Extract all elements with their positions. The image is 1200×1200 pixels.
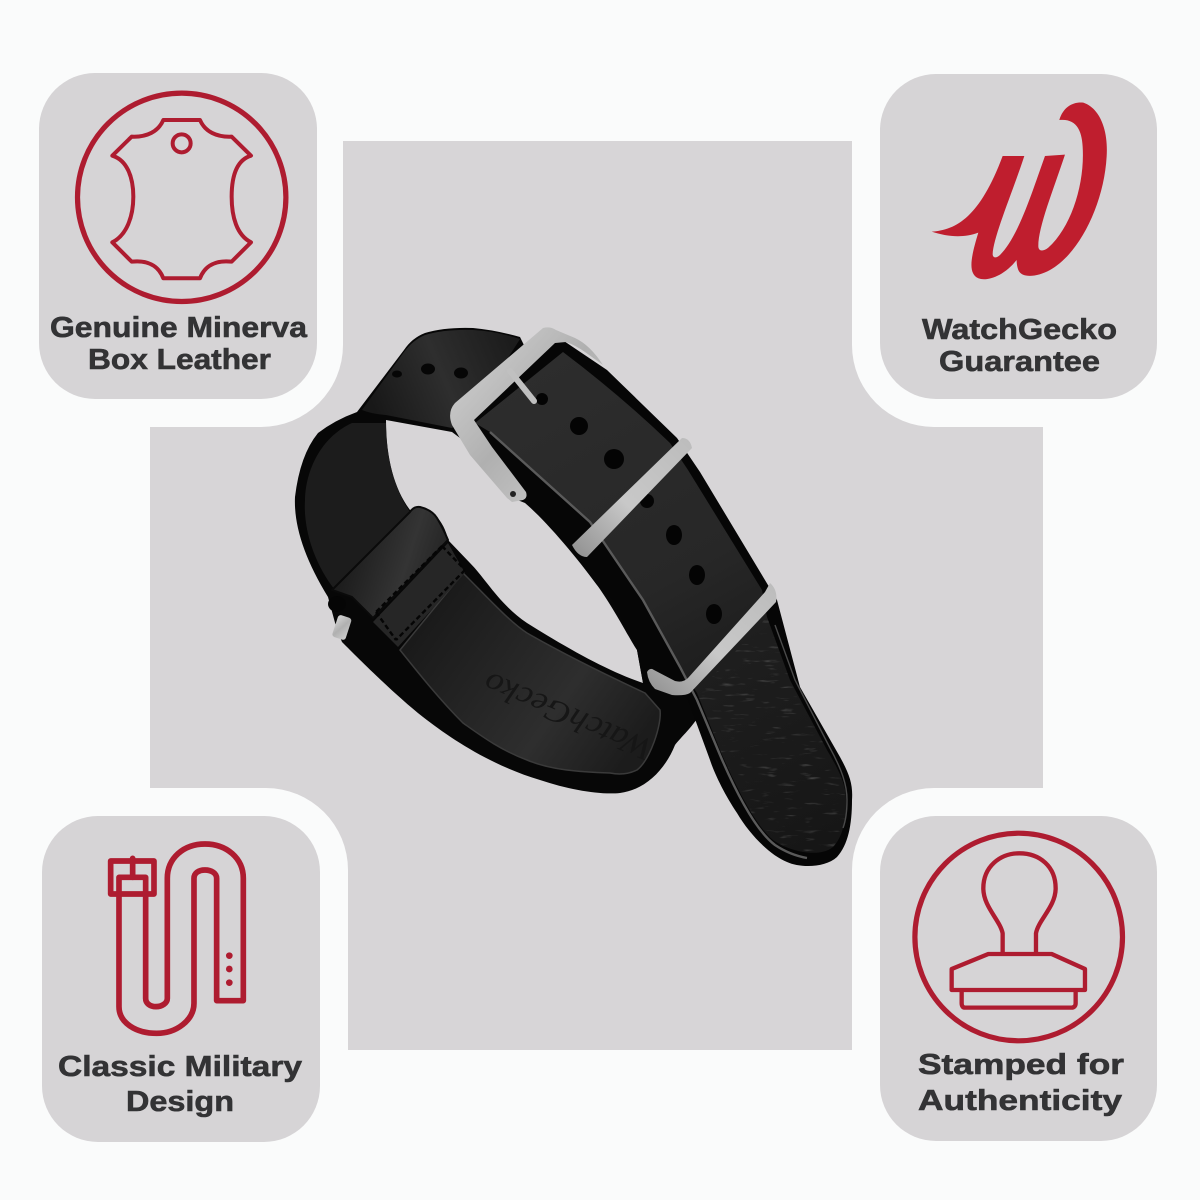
icon: rubber stamp [915,833,1122,1041]
stitched area [373,543,465,647]
card background [42,816,320,1142]
white halo: bottom right [852,788,1200,1200]
embossed brand script: WatchGecko [478,665,658,769]
label: Box Leather [88,344,271,376]
strap edge highlight [490,432,807,858]
strap upper band [362,330,520,428]
label: WatchGecko [922,314,1117,346]
label [50,312,308,376]
keeper loop [332,507,448,618]
product photo: black leather NATO strap [295,327,852,866]
buckle tongue [510,371,534,401]
middle keeper [572,438,692,557]
strap back loop [295,328,702,793]
label [58,1051,302,1118]
label [922,314,1117,378]
central grey panel [150,141,1043,1050]
strap lower inner surface [400,573,660,774]
card background [39,73,317,399]
white halo: bottom left [0,788,348,1200]
white halo: top left [0,0,343,427]
buckle frame [450,327,603,502]
leather grain on strap tip [697,617,846,853]
stitching [376,546,465,640]
strap right edge highlight [775,625,847,828]
icon: leather hide [78,93,286,302]
icon: WatchGecko W logo [932,103,1107,279]
band holes [392,364,468,378]
label: Genuine Minerva [50,312,308,344]
keeper pin [328,596,352,641]
lower keeper [647,583,776,695]
label: Design [126,1086,234,1118]
label [918,1049,1124,1117]
card: Stamped for Authenticity [880,816,1157,1141]
label: Guarantee [939,346,1100,378]
front strap surface [475,352,846,853]
card: WatchGecko Guarantee [880,74,1157,399]
card background [880,816,1157,1141]
label: Classic Military [58,1051,302,1083]
label: Stamped for [918,1049,1124,1081]
card: Genuine Minerva Box Leather [39,73,317,399]
white halo: top right [852,0,1200,427]
strap inner left surface [305,423,410,590]
card background [880,74,1157,399]
strap holes [536,393,722,624]
card: Classic Military Design [42,816,320,1142]
label: Authenticity [918,1085,1122,1117]
icon: looped strap [111,844,243,1033]
front strap outline [475,335,852,866]
